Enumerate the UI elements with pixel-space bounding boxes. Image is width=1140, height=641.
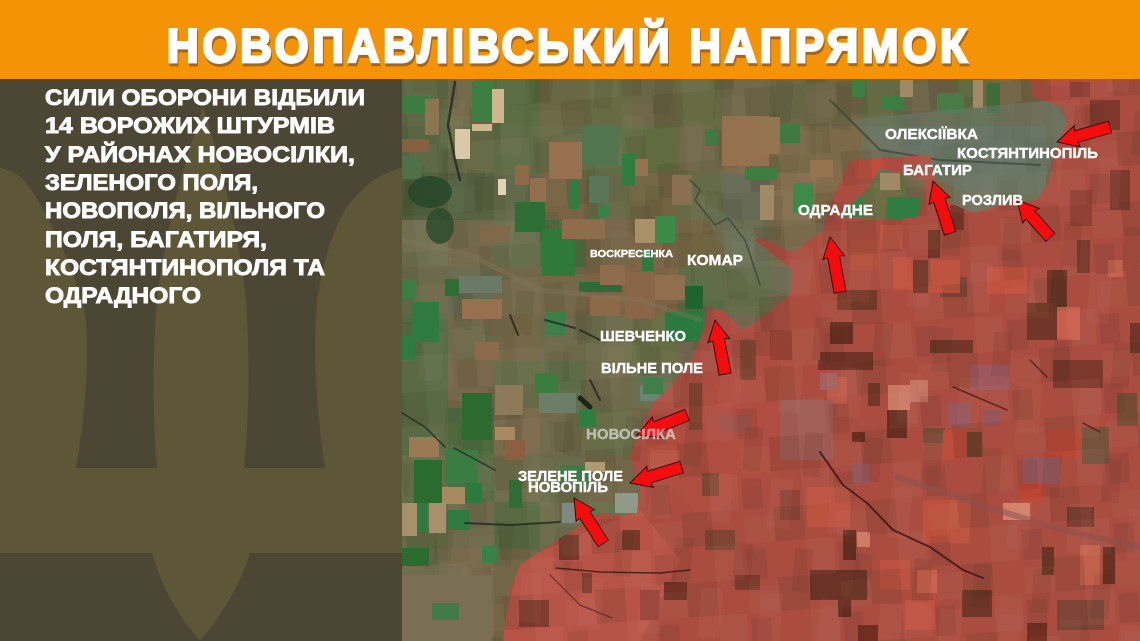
arrow: Novopil — [565, 492, 612, 549]
left panel background — [0, 79, 402, 641]
text block: summary of repelled assaults: ОДРАДНОГО — [45, 283, 201, 308]
text block: summary of repelled assaults: НОВОПОЛЯ, ВІЛЬНОГО — [45, 198, 325, 223]
label: Bahatyr: БАГАТИР — [903, 163, 972, 179]
label: Vilne Pole: ВІЛЬНЕ ПОЛЕ — [601, 361, 703, 377]
text block: summary of repelled assaults: ЗЕЛЕНОГО ПОЛЯ, — [45, 170, 258, 195]
map labels: place names — [518, 126, 1098, 496]
text block: summary of repelled assaults: 14 ВОРОЖИХ ШТУРМІВ — [45, 113, 335, 138]
map: occupied territory in red — [503, 79, 1140, 641]
map: ravines in occupied zone — [550, 360, 1140, 618]
text block: summary of repelled assaults: ПОЛЯ, БАГАТИРЯ, — [45, 227, 267, 252]
title: НОВОПАВЛІВСЬКИЙ НАПРЯМОК — [167, 19, 967, 72]
map: satellite base with occupied zone — [402, 79, 1140, 641]
map: individual fields outside the occupied zone — [402, 80, 1000, 641]
label: Voskresenka: ВОСКРЕСЕНКА — [590, 248, 673, 260]
label: Novopil: НОВОПІЛЬ — [528, 480, 608, 496]
map: settlements and river valleys — [402, 82, 1068, 525]
arrow: Odradne — [819, 235, 851, 294]
header band — [0, 0, 1140, 79]
text block: summary of repelled assaults: СИЛИ ОБОРОНИ ВІДБИЛИ — [45, 85, 365, 110]
map: field patchwork — [402, 79, 1140, 641]
text block: summary of repelled assaults — [45, 85, 365, 308]
title: НОВОПАВЛІВСЬКИЙ НАПРЯМОК — [168, 22, 968, 75]
label: Oleksiivka: ОЛЕКСІЇВКА — [885, 126, 979, 143]
map: dark, bright and purple fields — [519, 82, 1140, 641]
text block: summary of repelled assaults: У РАЙОНАХ НОВОСІЛКИ, — [45, 142, 355, 167]
arrow: Bahatyr — [923, 178, 961, 237]
text block: summary of repelled assaults: КОСТЯНТИНОПОЛЯ ТА — [45, 255, 325, 280]
label: Komar: КОМАР — [687, 253, 743, 269]
label: Kostiantynopil: КОСТЯНТИНОПІЛЬ — [957, 146, 1098, 162]
icon: trident emblem watermark — [0, 107, 402, 641]
arrow: Kostiantynopil — [1054, 116, 1113, 153]
label: Odradne: ОДРАДНЕ — [798, 203, 873, 219]
label: Rozlyv: РОЗЛИВ — [962, 193, 1023, 209]
arrow: Vilne Pole — [704, 318, 736, 376]
label: Shevchenko: ШЕВЧЕНКО — [600, 329, 686, 345]
arrow: Rozlyv — [1009, 193, 1058, 245]
label: Zelene Pole: ЗЕЛЕНЕ ПОЛЕ — [518, 469, 623, 485]
arrow: Zelene Pole — [627, 457, 685, 494]
label: Novosilka: НОВОСІЛКА — [586, 427, 677, 443]
arrows: attack directions — [565, 116, 1113, 549]
arrow: Novosilka — [633, 405, 691, 445]
